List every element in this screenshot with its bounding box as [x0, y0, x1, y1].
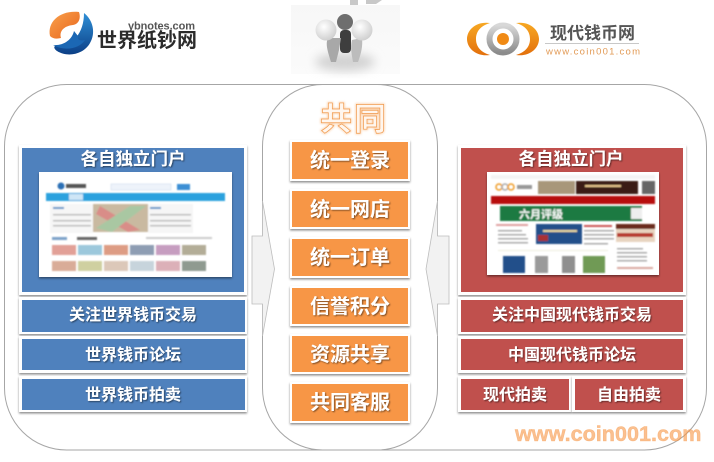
bar: 关注世界钱币交易	[19, 297, 247, 334]
image: three people huddle	[291, 0, 400, 74]
text: 世界纸钞网: 世界纸钞网	[97, 24, 197, 53]
heading: 共同: 共同	[320, 94, 388, 140]
icon: coin logo	[467, 23, 539, 55]
bar: 世界钱币论坛	[19, 336, 247, 373]
bar: 中国现代钱币论坛	[458, 336, 686, 373]
image: ybnotes website screenshot	[39, 172, 232, 277]
item: 统一订单	[290, 237, 410, 278]
bar: 中国现代钱币论坛: 中国现代钱币论坛	[508, 341, 636, 365]
bar: 现代拍卖	[458, 376, 572, 412]
heading: 各自独立门户: 各自独立门户	[80, 146, 186, 171]
bar: 自由拍卖: 自由拍卖	[597, 381, 661, 405]
bar: 关注中国现代钱币交易: 关注中国现代钱币交易	[492, 301, 652, 325]
panel: modern currency portal	[458, 145, 686, 295]
bar: 世界钱币拍卖: 世界钱币拍卖	[85, 381, 181, 405]
image: coin001 website screenshot: 六月评级	[519, 206, 563, 222]
logo: 现代钱币网	[467, 19, 640, 58]
item: 统一订单: 统一订单	[310, 241, 390, 270]
heading: 各自独立门户: 各自独立门户	[518, 146, 624, 171]
item: 统一网店: 统一网店	[310, 193, 390, 222]
bar: 世界钱币论坛: 世界钱币论坛	[85, 341, 181, 365]
item: 信誉积分	[290, 286, 410, 326]
bar: 关注中国现代钱币交易	[458, 297, 686, 334]
image: coin001 website screenshot	[487, 172, 659, 275]
bar: 关注世界钱币交易: 关注世界钱币交易	[69, 301, 197, 325]
item: 资源共享	[290, 334, 410, 374]
panel: world currency portal	[19, 145, 247, 295]
arrow: left to center	[252, 201, 274, 336]
watermark: www.coin001.com: www.coin001.com	[514, 421, 701, 446]
panel: shared services list	[290, 140, 410, 423]
item: 信誉积分: 信誉积分	[310, 290, 390, 319]
text: ybnotes.com: ybnotes.com	[128, 20, 195, 32]
panel: center shared column	[262, 84, 438, 450]
icon: globe logo	[50, 12, 93, 54]
item: 统一登录: 统一登录	[310, 144, 390, 173]
icon: grey fragment at top	[350, 0, 382, 5]
item: 共同客服	[290, 382, 410, 423]
text: www.coin001.com: www.coin001.com	[545, 46, 640, 58]
bar: 自由拍卖	[572, 376, 686, 412]
heading: 共同: 共同	[320, 94, 388, 140]
item: 统一登录	[290, 140, 410, 181]
logo: 世界纸钞网	[50, 12, 197, 54]
text: 现代钱币网: 现代钱币网	[550, 19, 635, 44]
bar: 现代拍卖: 现代拍卖	[483, 381, 547, 405]
arrow: right to center	[426, 201, 449, 336]
bar: 世界钱币拍卖	[19, 376, 247, 412]
item: 共同客服: 共同客服	[310, 386, 390, 415]
item: 资源共享: 资源共享	[310, 338, 390, 367]
panel: outer container	[4, 84, 706, 450]
item: 统一网店	[290, 189, 410, 229]
